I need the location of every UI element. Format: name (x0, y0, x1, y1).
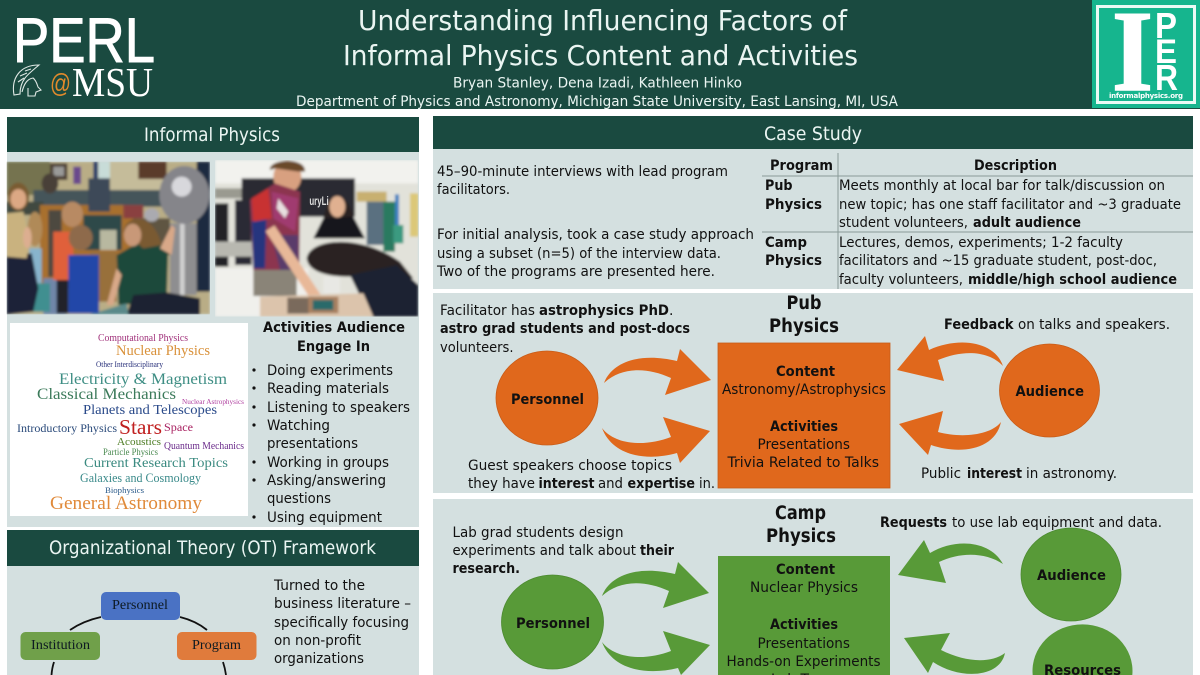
heading: Pub Physics: Physics (769, 316, 839, 337)
heading: Camp Physics: Camp (775, 503, 826, 524)
heading: Activities Audience Engage In: Engage In (297, 339, 370, 355)
box: content and activities: Astronomy/Astrophysics (722, 382, 886, 398)
word cloud: Computational Physics (98, 333, 188, 344)
bulleted list of activities: Doing experiments (267, 363, 393, 379)
arrow: resources to activities (904, 633, 1005, 674)
node: Personnel: Personnel (511, 392, 584, 408)
table: programs: Physics (765, 197, 822, 213)
text: public interest note: interest (967, 466, 1022, 482)
box: content and activities: Presentations (758, 636, 850, 652)
word cloud: Current Research Topics (84, 456, 228, 471)
box: content and activities (718, 343, 890, 488)
text: requests note: Requests (880, 515, 947, 531)
box: content and activities: Nuclear Physics (750, 580, 858, 596)
text: guest speakers note: in. (699, 476, 715, 492)
bulleted list of activities: Listening to speakers (267, 400, 410, 416)
title (343, 4, 858, 72)
authors: Bryan Stanley, Dena Izadi, Kathleen Hinko (453, 76, 742, 92)
text: requests note: to use lab equipment and data. (952, 515, 1162, 531)
table: programs: new topic; has one staff facilitator and ~3 graduate (839, 197, 1181, 213)
heading: Pub Physics (769, 293, 839, 337)
photo: students at an experiment table: uryLi (309, 194, 329, 208)
text: interview method: Two of the programs are presented here. (436, 264, 715, 280)
table: programs: Meets monthly at local bar for talk/discussion on (839, 178, 1165, 194)
box: content and activities: Trivia Related to Talks (727, 455, 879, 471)
bulleted list of activities: Working in groups (267, 455, 389, 471)
bulleted list of activities: questions (267, 491, 331, 507)
text: public interest note: Public (921, 466, 961, 482)
logo: PERL at MSU: @ (50, 68, 71, 98)
node: Program: Program (192, 638, 241, 653)
node: Personnel (496, 351, 598, 445)
word cloud: Introductory Physics (17, 421, 117, 435)
heading: Organizational Theory (OT) Framework: Organizational Theory (OT) Framework (49, 537, 376, 559)
text: facilitator note: Facilitator has (440, 303, 535, 319)
heading: Pub Physics: Pub (786, 293, 822, 314)
bulleted list of activities: Asking/answering (267, 473, 386, 489)
node: Personnel (101, 592, 180, 620)
text: facilitator note: volunteers. (440, 340, 514, 356)
affiliation: Department of Physics and Astronomy, Michigan State University, East Lansing, MI, USA (296, 94, 898, 110)
word cloud: Nuclear Physics (116, 343, 210, 359)
table: programs: Physics (765, 253, 822, 269)
cycle diagram (20, 592, 256, 675)
text: business literature note (273, 578, 411, 667)
text: business literature note: specifically focusing (274, 615, 409, 631)
panel: Informal Physics (7, 117, 419, 527)
table: programs: Lectures, demos, experiments; 1-2 faculty (839, 235, 1123, 251)
text: feedback note: Feedback (944, 317, 1014, 333)
text: feedback note (944, 317, 1170, 333)
table: programs: facilitators and ~15 graduate student, post-doc, (839, 253, 1157, 269)
node: Personnel (502, 575, 604, 669)
text: interview method: For initial analysis, took a case study approach (437, 227, 754, 243)
box: content and activities: Content (776, 562, 835, 578)
box: content and activities: Activities (770, 419, 838, 435)
bulleted list of activities (252, 363, 410, 526)
text: guest speakers note (468, 458, 715, 492)
bulleted list of activities: Watching (267, 418, 330, 434)
text: public interest note: in astronomy. (1026, 466, 1117, 482)
table: programs: Program (770, 158, 833, 174)
table: programs: Pub (765, 178, 792, 194)
word cloud: Other Interdisciplinary (96, 360, 163, 369)
arrow: audience requests to content (898, 540, 1003, 583)
heading: Case Study: Case Study (764, 123, 862, 145)
logo: IPER informalphysics.org: P (1155, 5, 1177, 46)
text: interview method: 45–90-minute interviews with lead program (437, 164, 728, 180)
panel: Pub Physics (433, 293, 1193, 493)
word cloud: Nuclear Astrophysics (182, 397, 244, 406)
text: lab grad students note: Lab grad students design (452, 525, 624, 541)
title: Understanding Influencing Factors of (358, 4, 848, 37)
word cloud: Stars (119, 415, 162, 439)
heading: Case Study (433, 116, 1193, 149)
logo: PERL at MSU (13, 6, 155, 105)
table: programs (762, 153, 1193, 289)
box: content and activities: Hands-on Experiments (726, 654, 880, 670)
word cloud: Quantum Mechanics (164, 441, 244, 452)
text: business literature note: business literature – (274, 596, 411, 612)
node: Audience: Audience (1016, 384, 1084, 400)
text: facilitator note: astrophysics PhD (539, 303, 669, 319)
text: business literature note: Turned to the (273, 578, 365, 594)
arrow: audience feedback to content (897, 336, 1003, 381)
word cloud: Classical Mechanics (37, 386, 176, 403)
table: programs: Camp (765, 235, 807, 251)
table: programs: faculty volunteers, (839, 272, 963, 288)
heading: Activities Audience Engage In (263, 320, 405, 355)
text: business literature note: on non-profit (274, 633, 361, 649)
heading: Informal Physics (7, 117, 419, 152)
bulleted list of activities: Reading materials (267, 381, 389, 397)
panel: Case Study (433, 116, 1193, 289)
text: guest speakers note: they have (468, 476, 535, 492)
box: content and activities (718, 556, 890, 675)
arrow: personnel to activities (602, 631, 710, 675)
heading: Camp Physics: Physics (766, 526, 836, 547)
arrow: personnel to content (604, 349, 711, 395)
bulleted list of activities: Using equipment (267, 510, 382, 526)
table: programs: student volunteers, (839, 215, 968, 231)
header banner (0, 0, 1200, 116)
text: business literature note: organizations (274, 651, 364, 667)
bulleted list of activities: presentations (267, 436, 358, 452)
logo: IPER informalphysics.org: R (1155, 57, 1178, 98)
heading: Camp Physics (766, 503, 836, 547)
word cloud (10, 323, 248, 516)
text: feedback note: on talks and speakers. (1018, 317, 1170, 333)
node: Personnel: Personnel (112, 598, 168, 613)
box: content and activities: Content (776, 364, 835, 380)
table: programs: Description (974, 158, 1057, 174)
logo: IPER informalphysics.org (1092, 0, 1200, 116)
word cloud: Galaxies and Cosmology (80, 471, 202, 485)
heading: Informal Physics: Informal Physics (144, 124, 280, 146)
text: guest speakers note: interest (538, 476, 595, 492)
photo: students at an experiment table (215, 160, 418, 317)
text: interview method: using a subset (n=5) of the interview data. (437, 246, 721, 262)
heading: Activities Audience Engage In: Activities Audience (263, 320, 405, 336)
node: Institution (20, 632, 100, 660)
word cloud: Acoustics (117, 436, 161, 448)
node: Personnel: Personnel (516, 616, 590, 632)
word cloud: Planets and Telescopes (83, 403, 217, 418)
node: Program (177, 632, 256, 660)
arrow: personnel to activities (602, 417, 710, 463)
text: guest speakers note: expertise (628, 476, 695, 492)
text: guest speakers note: and (598, 476, 623, 492)
arrow: audience interest to activities (899, 411, 1001, 455)
panel: Organizational Theory Framework (7, 530, 419, 675)
heading: Organizational Theory (OT) Framework (7, 530, 419, 566)
arrow: personnel to content (602, 562, 709, 608)
text: lab grad students note: their (640, 543, 674, 559)
text: interview method: facilitators. (437, 182, 510, 198)
panel: Camp Physics (433, 499, 1193, 675)
table: programs: middle/high school audience (968, 272, 1177, 288)
node: Audience (1021, 528, 1121, 621)
word cloud: General Astronomy (50, 493, 203, 514)
text: public interest note (921, 466, 1117, 482)
logo: PERL at MSU: PERL (13, 6, 155, 76)
node: Audience: Audience (1037, 568, 1106, 584)
text: facilitator note: . (669, 303, 673, 319)
text: interview method (436, 164, 754, 280)
photo: children with Van de Graaff generator (7, 162, 210, 314)
box: content and activities: Presentations (758, 437, 850, 453)
text: lab grad students note (452, 525, 674, 577)
logo: PERL at MSU: MSU (72, 59, 153, 105)
title: Informal Physics Content and Activities (343, 39, 858, 72)
logo: IPER informalphysics.org: informalphysics.org (1109, 92, 1183, 100)
node: Audience (1000, 344, 1100, 437)
text: lab grad students note: experiments and talk about (452, 543, 636, 559)
word cloud: Biophysics (105, 485, 144, 495)
logo: IPER informalphysics.org: E (1155, 33, 1177, 71)
word cloud: Particle Physics (103, 447, 158, 457)
text: facilitator note: astro grad students and post-docs (440, 321, 690, 337)
word cloud: Electricity & Magnetism (59, 371, 228, 388)
box: content and activities: Activities (770, 617, 838, 633)
text: facilitator note (440, 303, 690, 356)
text: lab grad students note: research. (452, 561, 520, 577)
text: guest speakers note: Guest speakers choose topics (468, 458, 672, 474)
word cloud: Space (164, 422, 193, 434)
node: Institution: Institution (31, 638, 90, 653)
table: programs: adult audience (973, 215, 1081, 231)
node: Resources (1032, 624, 1132, 675)
